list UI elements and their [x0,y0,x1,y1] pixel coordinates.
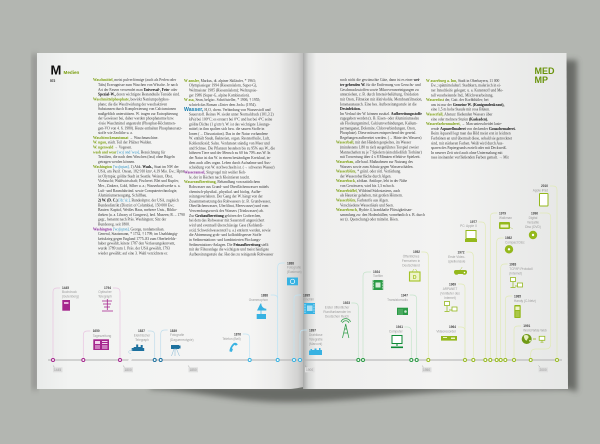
text column 4: Farbtönen an und übermalt diese, sobald sie getrocknet [431,136,512,142]
text column 2: W. enthält Staub, Bakterien, organ. Reststoffteile, Luft, [189,137,270,142]
event: 1952 Fernsehen: D [413,275,417,281]
text column 3: Wasserbau, alle baul. Maßnahmen zur Nutzung des [336,160,413,164]
event: 1650 Tageszeitung: Tageszeitung [93,334,111,338]
text column 2: Kohlendioxid; Salze. Verdunstet ständig von Meer und [189,142,270,146]
event: 1979 Walkman [499,212,513,229]
event: 1985 Handy: 1985 [514,294,521,298]
event: 1924 Tonfilm: 1924 [373,270,380,274]
right page heading: MED MP: MED [534,66,555,76]
text column 4: tall verarbeitende Ind., Milchverarbeitung. [431,93,493,98]
event: 1650 Tageszeitung [93,329,111,350]
event: 2010 Apple iPad [533,184,548,206]
text column 2: größte Dichte (1 g/cm³). W. ist das wichtigste Lösungs- [189,122,271,126]
event: 1895 Kinofilm [303,294,315,314]
text column 3: noch nicht die gewünschte Güte, dann ist es einer wei- [340,78,420,82]
event: 1972 Videospielkonsole: spielkonsole [448,260,466,264]
event: 1985 Handy [514,294,536,318]
event: 1839 Fotografie Daguerreotypie: 1839 [170,329,177,333]
event: 1947 Transistorradio [387,294,408,315]
event: 1876 Telefon: 1876 [234,332,241,336]
text column 1: keitskrieg gegen England 1775–83 zum Oberbefehls- [98,237,177,241]
section letter heading: Medien: M [50,62,61,77]
event: 1895 Kinofilm: Kinofilm [303,298,315,302]
text column 2: W amsler, Markus, dt. alpiner Skiläufer, * 1963; [184,79,256,83]
text column 4: Wasserfarbenmalerei, → Man unterscheidet lasie- [426,122,502,126]
text column 2: wird und eventuell überschüssige Gase (Kohlendi- [189,224,264,228]
text column 2: Sauerstoff. Reines W. siedet unter Normaldruck (101,3 2) [189,113,274,118]
event: 1982 Compact Disc: 1982 [505,236,512,240]
event: 1977 PC Apple II: 1977 [470,220,477,224]
text column 1: -freie Waschmittel angestrebt (Phosphat-Höchstmen- [98,121,177,125]
event: 1996 DVD: 1996 [531,212,538,216]
text column 2: Zusammensetzung des Rohwassers (z. B. Grundwasser, [189,199,271,204]
text column 3: ter gehenden W. für die Entfernung von Geruchs- und [340,83,421,87]
text column 3: von Gewässern, wird bis 1,3 m hoch. [340,184,395,189]
event: 1969 ARPANET: Internet) [444,296,456,300]
event: 1983 TCP/IP [509,263,533,288]
text column 2: le, der in Bächen nach Kleintieren taucht. [189,175,250,180]
event: 1996 DVD: Disc (DVD) [525,225,541,229]
text column 1: maßgeblich unterstützen. W. trugen zur Eutrophierung [98,112,178,116]
event: 1977 PC Apple II [460,220,477,242]
text column 2: Wasseraufbereitung, Behandlung von natürlichem [184,180,260,184]
event: 1991 World Wide Web: 1991 [523,324,531,328]
event: 1888 Grammophon: 1888 [261,294,268,298]
event: 1445 Buchdruck: 1445 [62,286,69,290]
event: 1952 Fernsehen: 1952 [413,250,420,254]
event: 1888 Fotografie Eastman [287,262,302,285]
event: 1650 Tageszeitung: 1650 [93,329,100,333]
text column 2: der Natur ist das W. in einem beständigen Kreislauf, in- [189,156,271,161]
text column 2: Ionen (→ Dissoziation). Das in der Natur vorhandene [189,132,268,136]
text column 4: Ew.; spätmittelalterl. Stadtkern, malerisch in ei- [431,84,502,89]
text column 1: Substanzen durch Komplexierung von Calciumionen [98,107,176,111]
text column 1: Bauten: Kapitol, Weißes Haus, mehrere Unis., Biblio- [98,208,178,213]
text column 3: zugegeben werden (z. B. Eisen- oder Aluminiumsalze [340,117,419,121]
text column 1: Mer., Zinkerz, Gold, Silber u. a.; Wasserkraftwerke u. a. [98,184,181,189]
text column 1: Bundesdistrikt (District of Columbia), 150 000 Ew.; [98,203,174,208]
text column 1: getragen werden können. [98,160,135,164]
text column 4: uns ist nur der Gemeine W. (Kunigundenkraut), [431,103,504,107]
text column 3: Phosphate). Diese müssen entsprechend der gesetzl. [340,131,416,135]
decade labels: 1445 [54,368,61,372]
text column 2: Wasser, H₂O, chem. Verbindung von Wasserstoff und [184,107,270,113]
event: 1991 World Wide Web [522,324,547,344]
event: 1947 Transistorradio: Transistorradio [387,298,408,302]
text column 4: Wasserdost der, Gatt. der Korbblütler; bei [426,98,489,102]
text column 3: der Wasseroberfläche durch Algen. [340,174,392,178]
event: 1794 Optischer Telegraph: Telegraph [98,294,112,298]
text column 2: kPa) bei 100°C; es erstarrt bei 0°C und hat bei 4°C seine [189,117,273,121]
text column 2: mit der Filteranlage die wichtigste und meist häufigste [189,248,269,252]
event: 1445 Buchdruck [62,286,79,311]
text column 3: Regelungen aufbereitet werden. (→ Härte des Wassers) [340,136,422,140]
event: 1888 Fotografie Eastman: Fotografie [287,266,301,270]
text column 1: W. ngau, städt. Teil der Pfälzer Walden. [93,141,152,145]
text column 1: USA, am Pazif. Ozean, 182 910 km², 4,19 Mio. Ew.; Hptst. [98,170,185,175]
text column 2: dem auch alles organ. Leben durch Aufnahme und Aus- [189,161,272,165]
text column 3: ser (z. Quetschung) oder mittelst. Böen. [340,218,399,222]
event: 1941 Computer: Computer [389,330,403,334]
event: 1888 Grammophon: Grammophon [249,298,268,302]
event: 1947 Transistorradio: 1947 [401,294,408,298]
decade labels [53,366,548,372]
text column 3: mit Ozon, Filtration mit Aktivkohle, Membranfiltration, [340,97,422,102]
event: 1445 Buchdruck: Buchdruck [62,290,77,294]
text column 1: gegr., benannt nach Präs. Washington; Sitz der [98,218,167,223]
text column 2: bei dem das Rohwasser mit Sauerstoff angereichert [189,219,264,223]
text column 1: Art der Fasern verwendet man Universal-, Fein- oder [98,88,177,92]
text column 3: Mannschaften zu je 7 Spielern (einschließlich Torhüter) [340,150,423,154]
text column 3: Wasserbock, afrikan. Antilope, lebt in der Nähe [336,179,407,183]
text column 3: mit Torwertung über 4 x 8 Minuten effektive Spielzeit. [340,155,421,159]
text column 2: Rohwasser aus Grund- und Oberflächenwasser mittels [189,185,269,189]
event: 2010 Apple iPad: Apple iPad [533,188,548,192]
event: 1972 Videospielkonsole: Erste Video- [448,255,465,259]
event: 1952 Fernsehen: Deutschland [402,264,420,268]
text column 4: rende Aquarellmalerei von deckender Gouachemalerei. [431,127,516,131]
text column 1: Waschmittelphosphate, bewirkt Natriumpolyphos- [93,97,170,101]
event: 1895 Kinofilm: 1895 [303,294,310,298]
text column 1: Luft- und Raumfahrtind. sowie Computertechnologie, [98,189,177,194]
event: 1964 Videorecorder [436,325,457,341]
event: 1888 Grammophon [249,294,268,319]
event: 1839 Fotografie Daguerreotypie [170,329,194,356]
text column 2: Olympiasieger 1994 (Riesenslalom, Super-G), [189,84,257,89]
text column 1: der Gewässer bei, daher werden phosphatarme bzw. [98,117,174,122]
book shadow [32,54,577,402]
text column 4: sparen des Papiergrunds erzielt oder mit Deckweiß. [431,146,507,150]
event: 1983 TCP/IP: TCP/IP-Protokoll [509,267,533,271]
text column 3: Wasserblüte, Farbstoffe aus Algen. [336,198,389,202]
event: 1888 Fotografie Eastman: 1888 [287,262,294,266]
text column 2: Zur Grobaufbereitung gehören der Grobrechen, [189,214,261,218]
event: 1969 ARPANET [440,283,460,312]
event: 1837 Elektrischer Telegraph: Elektrischer [134,334,150,338]
decade labels: 1950 [423,368,430,372]
event: 1445 Buchdruck: (Gutenberg) [62,294,79,298]
event: 1979 Walkman: Walkman [499,216,512,220]
event: 1897 Drahtlose Telegrafie: 1897 [309,328,316,332]
text column 1: haber gewählt, leitete 1787 den Verfassungskonvent, [98,242,175,247]
text column 3: unterziehen, z. B. durch Intensivbelüftung, Oxidation [340,93,419,98]
section letter heading: Medien: Medien [64,70,80,75]
text column 1: ist Olympia; größte Stadt ist Seattle. Weizen, Obst, [98,174,173,179]
text column 2: in Sedimentations- und kombinierten Flockungs- [189,238,262,242]
event: 1952 Fernsehen [402,250,420,281]
event: 1923 Rundfunksender [323,301,351,338]
text column 3: Desinfektion. [340,107,361,111]
text column 1: wash and wear [wɔʃ ənd 'wɛə], Bezeichnung für [93,150,165,154]
event: 1839 Fotografie Daguerreotypie: Fotografie [170,333,184,337]
text column 1: Aluminiumerzeugung, Schiffbau. [98,194,147,199]
text column 1: Washington ['wɔʃɪŋtən], 1) Abk. Wash., Staat im NW der [93,165,179,169]
text column 3: (mindestens 1,80 m tief) ausgeführtes Torspiel zweier [340,146,420,151]
event: 1794 Optischer Telegraph: 1794 [104,286,111,290]
text column 1: Waschmittel, meist pulverförmige (auch als Perlen oder [93,78,176,82]
event: 1977 PC Apple II: PC: Apple II [460,224,477,228]
text column 4: W asserburg a. Inn, Stadt in Oberbayern, 11 000 [426,79,499,83]
event: 1897 Drahtlose Telegrafie [309,328,323,355]
event: 1839 Fotografie Daguerreotypie: (Daguerreotypie) [170,338,194,342]
text column 4: Beim Aquarell legt man das Bild meist erst in leichten [431,132,511,136]
text column 2: mittel; in ihm spalten sich bzw. die sauren Stoffe in [189,127,265,131]
event: 1837 Elektrischer Telegraph [129,329,150,354]
text column 2: und Schnee. Die Pflanzen bestehen bis zu 95% aus W., die [189,146,275,151]
text column 2: scheidung von W. stoffwechseln ist. (→ schweres Wasser) [189,166,275,170]
event: 1897 Drahtlose Telegrafie: (Marconi) [309,342,322,346]
event: 1964 Videorecorder: 1964 [449,325,456,329]
text column 2: reitungsverfahren. Der Gang der W. hängt von der [189,195,263,199]
right page [303,53,568,389]
event: 1794 Optischer Telegraph: Optischer [98,290,112,294]
text column 4: ner Innschleife gelegen; u. a. Kunststoff und Me- [431,88,504,92]
timeline markers [52,358,558,362]
text column 1: phate; die die Waschwirkung der waschaktiven [98,102,167,106]
event: 1924 Tonfilm: Tonfilm [373,274,383,278]
text column 1: Bundesreg. seit 1800. [98,222,130,226]
text column 1: Waschtrockenautomat → Waschmaschine. [93,136,158,140]
text column 1: Spezial-W., deren wichtigste Bestandteile Tenside sind. [98,93,180,97]
event: 1982 Compact Disc: Compact Disc [505,240,525,244]
text column 2: schrieb das Roman »Unter dem Joch« (1954). [189,103,256,107]
text column 2: oxid, Schwefelwasserstoff u. a.) entfernt werden, sowie [189,228,271,233]
event: 1876 Telefon: Telefon (Bell) [222,337,241,341]
event: 1897 Drahtlose Telegrafie: Telegrafie [309,338,323,342]
text column 4: nass ineinander verfließenden Farben gemalt. → Mit [431,156,509,160]
text column 3: permanganat, Dolomite, Chlorverbindungen, Ozon, [340,126,416,131]
text column 1: wieder gewählt; auf eine 3. Wahl verzichtete er. [98,251,168,255]
event: 1996 DVD: Versatile [527,220,539,224]
event: 1969 ARPANET: (Vorläufer des [440,292,460,296]
left page [37,53,303,389]
text column 2: höheren Tiere und der Mensch zu 60 bis 70% aus W. In [189,151,271,155]
text column 1: Textilien, die nach dem Waschen (fast) ohne Bügeln [98,155,175,160]
event: 1983 TCP/IP: (Internet) [509,272,522,276]
text column 1: theken (u. a. Library of Congress), bed. Museen; R. – 1790 [98,213,185,218]
text column 3: als Haustier gehalten, mit großen Hörnern. [340,194,403,199]
text column 1: General, Staatsmann, * 1732, † 1799; im Unabhängig- [98,232,179,237]
event: 1979 Walkman: 1979 [499,212,506,216]
event: 1888 Fotografie Eastman: (Eastman) [287,270,302,274]
decade labels: 1800 [124,368,132,372]
event: 1837 Elektrischer Telegraph: Telegraph [135,338,149,342]
event: 1996 DVD: Digital [529,216,538,220]
text column 2: Wasseramsel, Singvogel mit weißer Keh- [184,170,246,174]
decade labels: 1900 [306,368,313,372]
event: 1972 Videospielkonsole: 1972 [458,250,465,254]
text column 3: Wasserbruch, Hydrie 4, krankhafte Flüssigkeitsan- [336,208,412,212]
text column 3: Wasserbüffel, Wildrind Südostasiens, auch [336,189,400,193]
text column 2: W asa, Sean, belgisc. Schriftsteller, * 1906, † 1955; [184,98,260,102]
right page heading: MED MP [534,66,555,85]
event: 1924 Tonfilm [373,270,383,290]
text column 4: sind, mit stärkeren Farben. Weiß wird durch Aus- [431,141,504,146]
event: 1876 Telefon [222,332,241,352]
text column 1: gen-VO von 4. 6. 1980). Heute enthalten Phosphatersatz- [98,126,183,130]
event: 1996 DVD [525,212,541,239]
text column 3: Wasserblüte, * grünl. oder rötl. Verfärbung [336,170,400,174]
event: 1983 TCP/IP: 1983 [509,263,517,267]
text column 4: Wasserfall, Absturz fließenden Wassers über [426,112,492,116]
event: 1952 Fernsehen: Fernsehen in [402,259,420,263]
text column 2: Oberflächenwasser, Uferfiltrat, Meerwasser) und vom [189,204,269,209]
text column 2: Aufbereitungsstufe dar. Hat das zu reinigende Rohwasser [189,252,274,256]
event: 1952 Fernsehen: Öffentliches [403,254,420,258]
event: 1941 Computer: 1941 [396,325,403,329]
text column 4: In neuerer Zeit wird auch ohne Untermalung mit [431,151,502,155]
text column 1: stoffe wie Zeolithe u. a. [98,131,133,135]
section letter heading: Medien [50,62,80,77]
text column 4: eine oder mehrere Stufen (Kaskaden). [431,117,488,121]
right page heading: MED MP: MP [534,75,548,85]
timeline axis [48,356,562,364]
text column 3: Geschmacksstoffen sowie Mikroverunreinigungen zu [340,88,419,92]
decade labels: 1850 [190,368,197,372]
text column 3: Verschiedene Wasserläufe und Seen. [340,203,394,207]
text column 2: Weltmeister 1985 (Riesenslalom); Weltcupsie- [189,89,258,93]
text column 3: Ionenaustausch. Eine bes. Aufbereitungsstufe ist die [340,102,417,106]
event: 1897 Drahtlose Telegrafie: Drahtlose [309,333,323,337]
text column 2: chemisch-physikal., physikal. und biolog. Aufbe- [189,190,262,195]
event: 1972 Videospielkonsole [448,250,467,275]
event: 2010 Apple iPad: 2010 [541,184,548,188]
text column 1: wurde 1789 zum 1. Präs. der USA gewählt, 1793 [98,247,170,252]
event: 1969 ARPANET: ARPANET [443,287,457,291]
decade labels: 2000 [540,368,547,372]
event: 1991 World Wide Web: World Wide Web [523,328,547,332]
text column 3: sammlung zw. den Hodenhüllen; vornehmlich z. B. durch [340,213,425,217]
text column 1: 2) W. (D. C.) ['dɪ:'si:], Bundeshptst. der USA, zugleich [98,198,179,202]
connector lines [53,186,557,360]
event: 1941 Computer [389,325,403,348]
event: 1837 Elektrischer Telegraph: 1837 [138,329,145,333]
text column 3: als Flockungsmittel, Calciumverbindungen, Kalium- [340,121,418,126]
event: 1794 Optischer Telegraph [98,286,113,311]
text column 3: Im Verlauf der W. können zusätzl. Aufbereitungsstoffe [340,112,422,116]
text column 3: Wassers sowie zum Schutz gegen Wasserschäden. [340,165,413,169]
event: 1969 ARPANET: 1969 [449,283,456,287]
text column 1: Washington ['wɔʃɪŋtən], George, nordamerikan. [93,227,164,231]
text column 1: Viehzucht; Waldwirtschaft; Fischerei. Blei und Kupfer, [98,179,179,184]
text column 2: Sedimentations-Anlagen. Die Feinaufbereitung stellt [189,243,268,247]
event: 1923 Rundfunksender: 1923 [343,301,350,305]
event: 1964 Videorecorder: Videorecorder [436,329,456,333]
text column 3: Wasserball, mit den Händen gespieltes, im Wasser [336,141,411,145]
text column 1: Tabs) Erzeugnisse zum Waschen von Wäsche. Je nach [98,83,178,87]
event: 1923 Rundfunksender: Erster öffentlicher [325,306,349,310]
text column 2: die Abtrennung grob- und kolloiddisperser Stoffe [189,233,262,237]
event: 1923 Rundfunksender: Rundfunksender im [323,310,351,314]
text column 2: Verwendungszweck des Wassers (Trinkwasser) ab. [189,209,264,213]
event: 1985 Handy: Handy (C-Netz) [514,299,536,303]
text column 4: eine 1,5 m hohe Staude mit rosa Blüten. [431,108,490,113]
text column 2: ger 1986 (Super-G, alpine Kombination). [189,93,250,98]
event: 1982 Compact Disc [505,236,525,254]
page number: 572 [50,79,56,83]
text column 1: W. ngenwald → Vogesen. [93,146,132,150]
event: 1923 Rundfunksender: Deutschen Reich [325,314,349,318]
